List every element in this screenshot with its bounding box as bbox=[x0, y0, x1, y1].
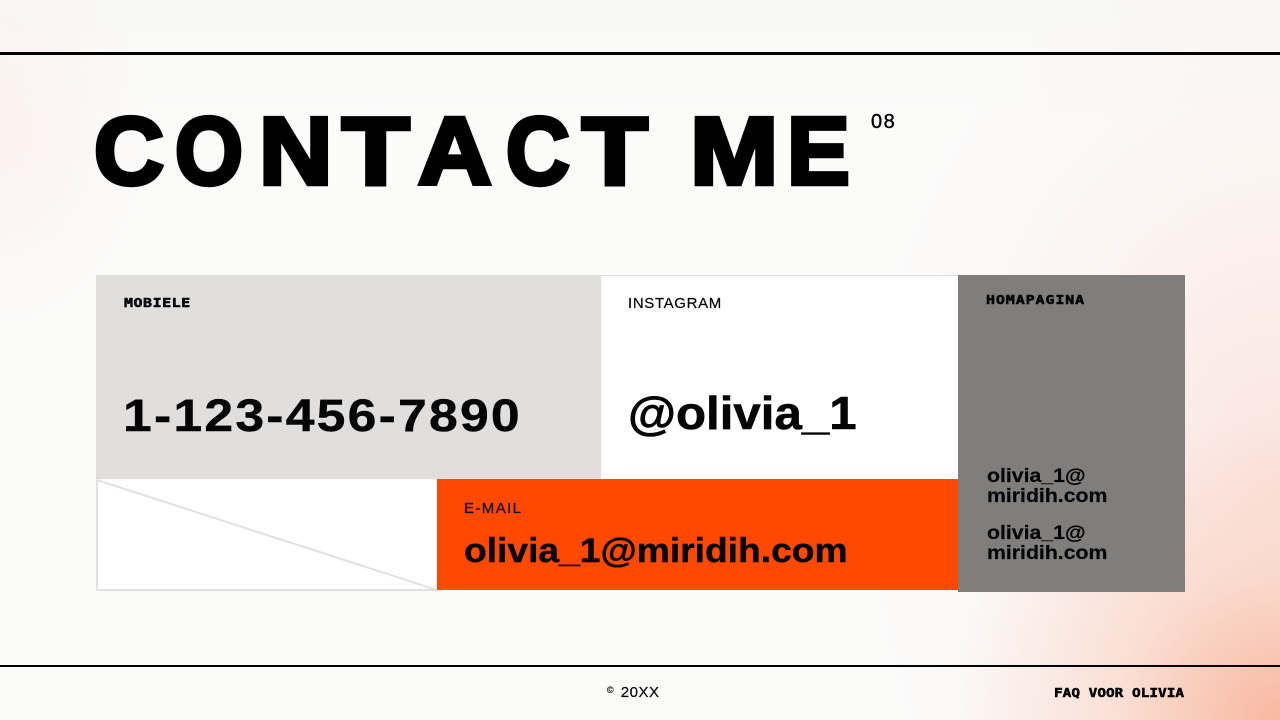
label: homepage: HOMAPAGINA bbox=[986, 293, 1085, 307]
panel: mobile bbox=[96, 275, 601, 479]
title: A bbox=[418, 98, 491, 205]
instagram handle: @olivia_1 bbox=[628, 387, 857, 439]
title: C bbox=[506, 98, 569, 205]
contact lines 2: olivia_1@ bbox=[987, 523, 1086, 544]
label: mobile: MOBIELE bbox=[124, 296, 191, 310]
panel: e-mail bbox=[437, 479, 958, 590]
title: M bbox=[690, 98, 778, 205]
title: T bbox=[582, 98, 647, 205]
e-mail address: olivia_1@miridih.com bbox=[464, 532, 848, 570]
title bbox=[94, 98, 849, 205]
page number: 08 bbox=[871, 111, 896, 133]
contact lines 2: miridih.com bbox=[987, 543, 1107, 564]
footer: copyright: © 20XX bbox=[607, 684, 660, 701]
title: C bbox=[94, 98, 164, 205]
contact lines 1: miridih.com bbox=[987, 486, 1107, 507]
title: O bbox=[174, 98, 242, 205]
label: instagram: INSTAGRAM bbox=[628, 295, 722, 312]
footer: name: FAQ VOOR OLIVIA bbox=[1054, 686, 1184, 700]
label: e-mail: E-MAIL bbox=[464, 500, 522, 517]
title: N bbox=[259, 98, 332, 205]
contact lines 2 bbox=[987, 523, 1107, 564]
title: T bbox=[342, 98, 409, 205]
panel: homepage bbox=[958, 275, 1185, 592]
panel: diagonal decoration bbox=[96, 479, 437, 591]
title: E bbox=[786, 98, 849, 205]
contact lines 1 bbox=[987, 466, 1107, 507]
contact lines 1: olivia_1@ bbox=[987, 466, 1086, 487]
panel: instagram bbox=[601, 275, 958, 479]
phone number: 1-123-456-7890 bbox=[123, 390, 522, 441]
